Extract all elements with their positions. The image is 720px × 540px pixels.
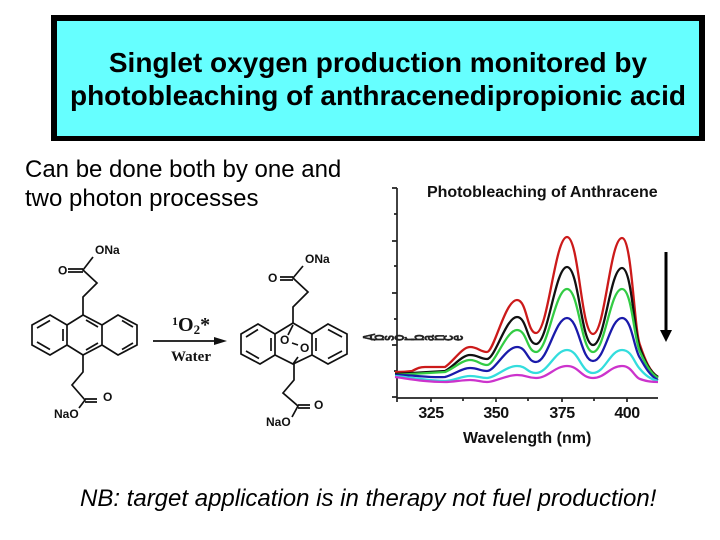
title: Singlet oxygen production monitored by — [109, 47, 647, 78]
title box — [51, 15, 705, 141]
note: target application: NB: target application is in therapy not fuel production! — [80, 485, 656, 512]
molecule: endoperoxide product — [241, 252, 347, 429]
text block: one and two photon processes: Can be done both by one and — [25, 156, 341, 183]
curve: blue — [395, 318, 658, 380]
x axis label: Wavelength (nm) — [463, 430, 591, 447]
arrow: reaction with singlet oxygen in water: O — [178, 314, 194, 336]
arrow: reaction with singlet oxygen in water: 1 — [172, 314, 178, 328]
arrow: reaction with singlet oxygen in water: * — [200, 314, 210, 336]
molecule: endoperoxide product: O — [268, 271, 277, 285]
chart: photobleaching spectra — [360, 184, 672, 447]
y axis label: Absorbance — [360, 333, 468, 341]
molecule: endoperoxide product: NaO — [266, 415, 291, 429]
molecule: anthracenedipropionic acid — [32, 243, 137, 421]
curve: cyan — [395, 350, 658, 381]
text block: one and two photon processes: two photon processes — [25, 184, 258, 212]
x axis tick labels: 350 — [483, 405, 509, 422]
title: photobleaching of anthracenedipropionic acid — [70, 80, 686, 111]
molecule: anthracenedipropionic acid: O — [58, 264, 67, 278]
molecule: endoperoxide product: ONa — [305, 252, 330, 266]
curve: magenta — [395, 366, 658, 382]
molecule: anthracenedipropionic acid: O — [103, 390, 112, 404]
arrow: reaction with singlet oxygen in water: Water — [171, 349, 211, 365]
arrow: decreasing absorbance — [660, 252, 672, 342]
title — [70, 47, 686, 111]
text block: one and two photon processes — [25, 156, 341, 212]
curve: red — [395, 237, 658, 377]
molecule: endoperoxide product: O — [300, 341, 309, 355]
curve: black — [395, 267, 658, 377]
molecule: anthracenedipropionic acid: NaO — [54, 407, 79, 421]
molecule: endoperoxide product: O — [280, 333, 289, 347]
chart title: Photobleaching of Anthracene — [427, 184, 658, 201]
axes and ticks — [392, 188, 658, 402]
spectra curves — [395, 237, 658, 382]
reaction scheme — [32, 243, 347, 429]
arrow: reaction with singlet oxygen in water — [153, 314, 227, 365]
molecule: anthracenedipropionic acid: ONa — [95, 243, 120, 257]
arrow: reaction with singlet oxygen in water: 2 — [194, 322, 200, 337]
x axis tick labels: 325 — [418, 405, 444, 422]
x axis tick labels: 400 — [614, 405, 640, 422]
curve: green — [395, 289, 658, 378]
x axis tick labels — [418, 405, 640, 422]
x axis tick labels: 375 — [549, 405, 575, 422]
molecule: endoperoxide product: O — [314, 398, 323, 412]
